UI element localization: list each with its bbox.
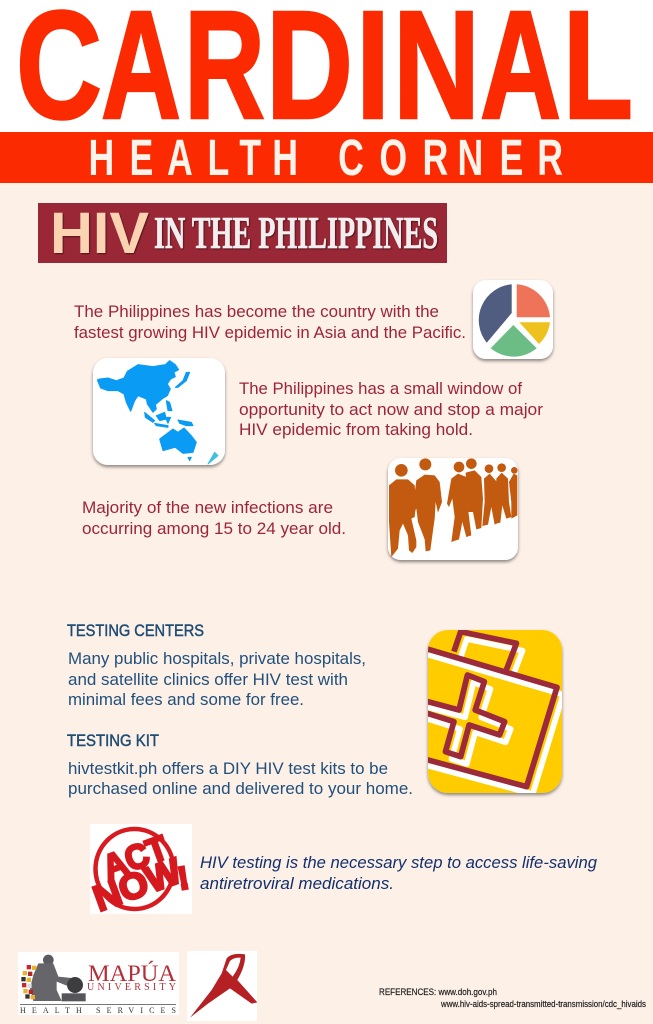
icon: act now stamp: NOW xyxy=(88,850,186,919)
text: majority of new infections: Majority of the new infections are xyxy=(82,498,333,517)
icon: pie chart card xyxy=(473,280,553,359)
header band: health corner: HEALTH CORNER xyxy=(88,130,563,187)
text: small window of opportunity: The Philippines has a small window of xyxy=(239,379,522,398)
logo: Mapua University Health Services: UNIVERSITY xyxy=(87,982,176,993)
text: fastest growing epidemic: fastest growing HIV epidemic in Asia and the Pacific. xyxy=(74,323,466,342)
text: small window of opportunity: HIV epidemic from taking hold. xyxy=(239,420,473,439)
references: REFERENCES: www.doh.gov.ph xyxy=(379,987,497,997)
heading: testing centers: TESTING CENTERS xyxy=(67,621,204,640)
icon: act now stamp: ACT xyxy=(98,829,173,887)
icon: red ribbon xyxy=(187,951,257,1021)
heading: testing kit: TESTING KIT xyxy=(67,731,159,750)
text: fastest growing epidemic xyxy=(74,302,466,342)
text: testing centers description: minimal fees and some for free. xyxy=(68,690,304,709)
icon: act now stamp xyxy=(88,824,192,919)
logo: Mapua University Health Services: HEALTH SERVICES xyxy=(20,1006,176,1015)
text: testing centers description: Many public hospitals, private hospitals, xyxy=(68,649,366,668)
callout: HIV testing step: HIV testing is the necessary step to access life-saving xyxy=(200,853,598,872)
icon: silhouettes of young people card xyxy=(388,458,518,560)
header: white title area xyxy=(0,0,653,151)
text: testing kit description: hivtestkit.ph offers a DIY HIV test kits to be xyxy=(68,759,388,778)
text: majority of new infections xyxy=(82,498,346,538)
icon: Asia Pacific map card xyxy=(93,358,225,465)
text: testing kit description xyxy=(68,759,413,798)
logo: Mapua University Health Services xyxy=(18,952,179,1015)
logo: Mapua University Health Services: MAPÚA xyxy=(88,960,176,986)
references xyxy=(379,987,646,1009)
icon: first aid kit xyxy=(422,630,563,794)
heading: HIV in the Philippines xyxy=(38,201,447,266)
text: fastest growing epidemic: The Philippines has become the country with the xyxy=(74,302,439,321)
text: majority of new infections: occurring among 15 to 24 year old. xyxy=(82,519,346,538)
text: small window of opportunity xyxy=(239,379,543,439)
callout: HIV testing step xyxy=(200,853,598,893)
text: testing kit description: purchased online and delivered to your home. xyxy=(68,779,413,798)
icon: act now stamp: ! xyxy=(175,859,192,897)
text: small window of opportunity: opportunity to act now and stop a major xyxy=(239,400,543,419)
text: testing centers description xyxy=(68,649,366,709)
text: testing centers description: and satellite clinics offer HIV test with xyxy=(68,670,348,689)
heading: HIV in the Philippines: IN THE PHILIPPINES xyxy=(154,207,438,258)
callout: HIV testing step: antiretroviral medications. xyxy=(200,874,394,893)
heading: HIV in the Philippines: HIV xyxy=(50,201,149,266)
